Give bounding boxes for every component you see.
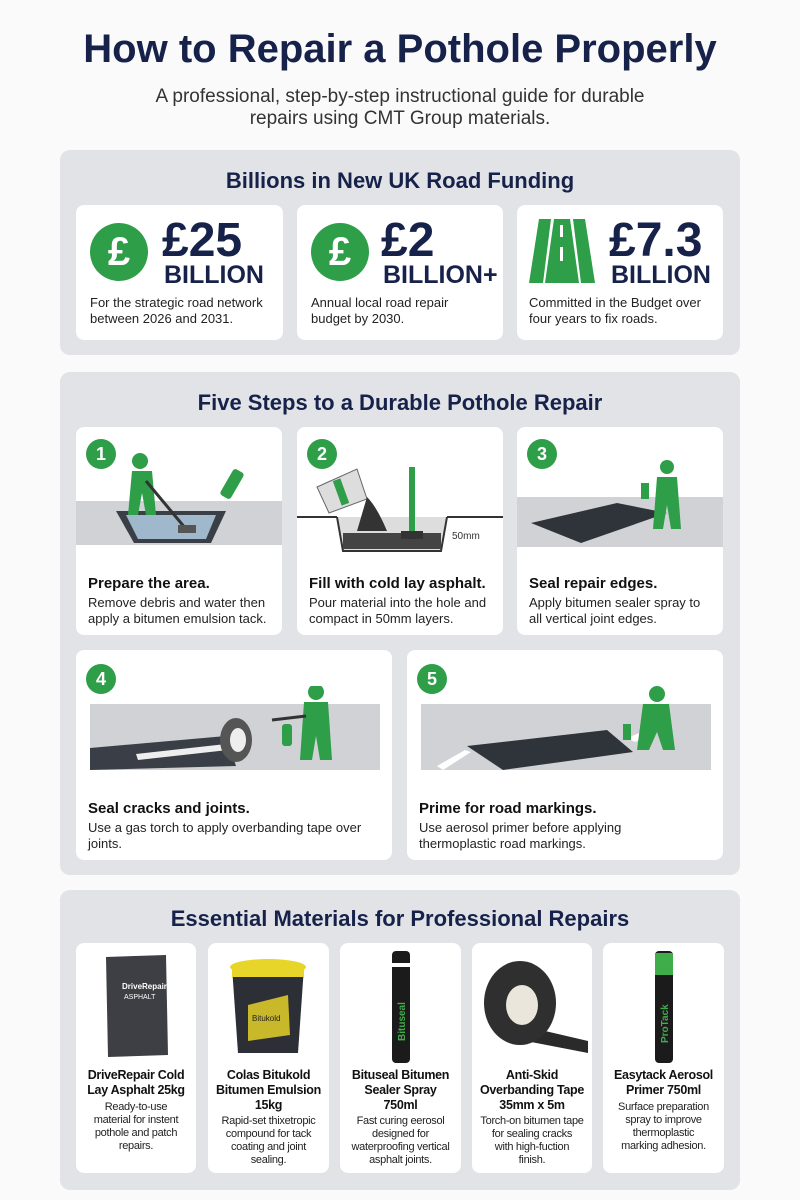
image: tub [230, 959, 306, 1053]
product name: 15kg [255, 1098, 282, 1112]
product name [480, 1068, 584, 1112]
product text: for sealing cracks [492, 1128, 572, 1140]
product name: Anti-Skid [506, 1068, 558, 1082]
description: For the strategic road network [90, 295, 263, 310]
product text: spray to improve [625, 1114, 702, 1126]
product name: Sealer Spray [364, 1083, 437, 1097]
description: Committed in the Budget over [529, 295, 701, 310]
number 5 [417, 664, 447, 694]
subtitle: A professional, step-by-step instructional guide for durable [156, 86, 644, 107]
card: £25 billion [76, 205, 283, 340]
product name: Primer 750ml [626, 1083, 701, 1097]
card: £2 billion [297, 205, 503, 340]
illustration: fill [297, 467, 503, 552]
step text [529, 595, 700, 626]
product text [94, 1101, 178, 1152]
heading: materials: Essential Materials for Professional Repairs [171, 906, 629, 931]
product text: designed for [372, 1128, 429, 1140]
product text: with high-fuction [495, 1141, 569, 1153]
image: tub: Bitukold [252, 1014, 280, 1023]
step text [309, 595, 486, 626]
image: spray can: Bituseal [397, 1002, 408, 1041]
product text: waterproofing vertical [352, 1141, 449, 1153]
product text: marking adhesion. [621, 1140, 706, 1152]
product name: Easytack Aerosol [614, 1068, 713, 1082]
step 2 [297, 427, 503, 635]
step 1 [76, 427, 282, 635]
product name [352, 1068, 449, 1112]
step text: Apply bitumen sealer spray to [529, 595, 700, 610]
number 2 [307, 439, 337, 469]
illustration: seal edges [517, 460, 723, 547]
number 4 [86, 664, 116, 694]
number 1: 1 [96, 444, 106, 464]
step text: joints. [88, 836, 122, 851]
image: primer can [655, 951, 673, 1063]
step 3 [517, 427, 723, 635]
icon: pound coin: £ [329, 230, 351, 274]
image: asphalt bag: ASPHALT [124, 994, 156, 1001]
figure: £25 [162, 214, 242, 267]
step text: apply a bitumen emulsion tack. [88, 611, 266, 626]
description: Annual local road repair [311, 295, 448, 310]
product text: Torch-on bitumen tape [480, 1115, 584, 1127]
description [529, 295, 701, 326]
image: tape roll [484, 961, 588, 1053]
product text: material for instent [94, 1114, 178, 1126]
step text: Pour material into the hole and [309, 595, 486, 610]
product text: finish. [519, 1154, 545, 1166]
description: between 2026 and 2031. [90, 311, 233, 326]
illustration: prime markings [421, 686, 711, 770]
subtitle: repairs using CMT Group materials. [250, 108, 550, 129]
product text: repairs. [119, 1140, 153, 1152]
product text: coating and joint [231, 1141, 306, 1153]
step text [88, 820, 361, 851]
product text: pothole and patch [95, 1127, 177, 1139]
icon: pound coin [311, 223, 369, 281]
product text: sealing. [251, 1154, 286, 1166]
material 3 [340, 943, 461, 1173]
product text: Surface preparation [618, 1101, 709, 1113]
step title: Seal cracks and joints. [88, 800, 250, 817]
step text: Remove debris and water then [88, 595, 265, 610]
product name [614, 1068, 713, 1097]
panel: materials [60, 890, 740, 1190]
step 5 [407, 650, 723, 860]
product name [87, 1068, 185, 1097]
material 2 [208, 943, 329, 1173]
step title: Prime for road markings. [419, 800, 597, 817]
icon: road [529, 219, 595, 283]
product name: 35mm x 5m [499, 1098, 565, 1112]
subtitle [156, 86, 644, 129]
product text: compound for tack [226, 1128, 311, 1140]
step text: thermoplastic road markings. [419, 836, 586, 851]
step text: Use aerosol primer before applying [419, 820, 621, 835]
illustration: fill: 50mm [452, 531, 480, 542]
heading: funding: Billions in New UK Road Funding [226, 168, 574, 193]
image: spray can [392, 951, 410, 1063]
image: asphalt bag [106, 955, 168, 1057]
material 4 [472, 943, 592, 1173]
product text [480, 1115, 584, 1166]
product text: Fast curing eerosol [357, 1115, 444, 1127]
number 3: 3 [537, 444, 547, 464]
product text [618, 1101, 709, 1152]
product name: DriveRepair Cold [88, 1068, 184, 1082]
description: budget by 2030. [311, 311, 404, 326]
product text [352, 1115, 450, 1166]
step text: compact in 50mm layers. [309, 611, 454, 626]
number 2: 2 [317, 444, 327, 464]
product text: thermoplastic [633, 1127, 694, 1139]
product text: Ready-to-use [105, 1101, 167, 1113]
material 1 [76, 943, 196, 1173]
product name: Bituseal Bitumen [352, 1068, 449, 1082]
figure: £7.3 [609, 214, 702, 267]
description: four years to fix roads. [529, 311, 658, 326]
heading: steps: Five Steps to a Durable Pothole Repair [198, 390, 602, 415]
number 5: 5 [427, 669, 437, 689]
illustration: overbanding [90, 686, 380, 770]
product text [222, 1115, 316, 1166]
product name: 750ml [384, 1098, 417, 1112]
step text: Use a gas torch to apply overbanding tape over [88, 820, 361, 835]
product name: Overbanding Tape [480, 1083, 584, 1097]
step text: all vertical joint edges. [529, 611, 657, 626]
step title: Seal repair edges. [529, 575, 657, 592]
card: £7.3 billion: BILLION [611, 261, 711, 289]
icon: pound coin: £ [108, 230, 130, 274]
illustration: prepare [76, 453, 282, 545]
step title: Prepare the area. [88, 575, 210, 592]
number 1 [86, 439, 116, 469]
step text [419, 820, 621, 851]
step 4 [76, 650, 392, 860]
product name: Lay Asphalt 25kg [87, 1083, 185, 1097]
panel: steps [60, 372, 740, 875]
card: £25 billion: BILLION [164, 261, 264, 289]
title: How to Repair a Pothole Properly [83, 27, 717, 71]
product name: Colas Bitukold [227, 1068, 310, 1082]
product name [216, 1068, 321, 1112]
step title: Fill with cold lay asphalt. [309, 575, 486, 592]
product text: Rapid-set thixetropic [222, 1115, 315, 1127]
image: primer can: ProTack [660, 1004, 671, 1043]
panel: funding [60, 150, 740, 355]
step text [88, 595, 266, 626]
number 4: 4 [96, 669, 106, 689]
description [90, 295, 263, 326]
description [311, 295, 448, 326]
icon: pound coin [90, 223, 148, 281]
product text: asphalt joints. [369, 1154, 432, 1166]
card: £7.3 billion [517, 205, 723, 340]
product name: Bitumen Emulsion [216, 1083, 321, 1097]
material 5 [603, 943, 724, 1173]
figure: £2 [381, 214, 434, 267]
card: £2 billion: BILLION+ [383, 261, 498, 289]
number 3 [527, 439, 557, 469]
image: asphalt bag: DriveRepair [122, 982, 167, 991]
